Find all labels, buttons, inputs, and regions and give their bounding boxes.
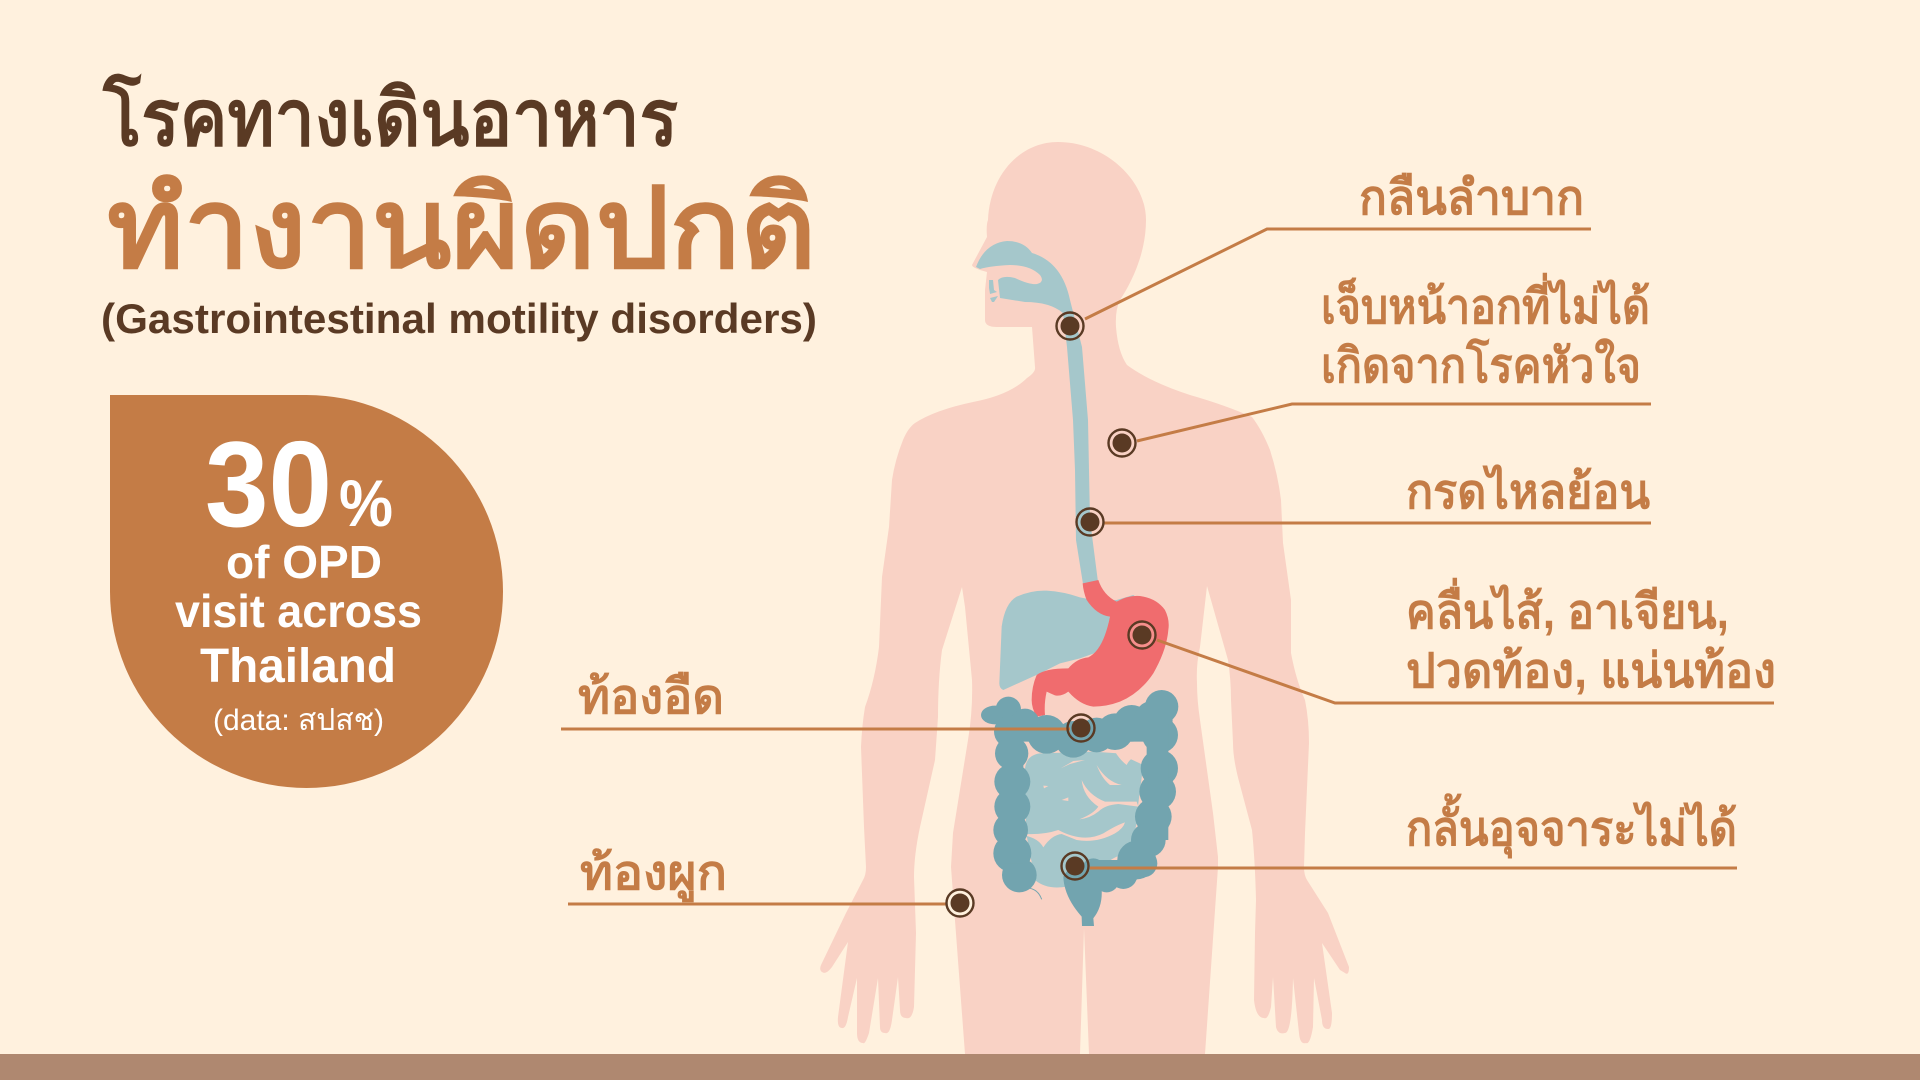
title line 2: ทำงานผิดปกติ xyxy=(107,166,816,291)
label: fecal incontinence: กลั้นอุจจาระไม่ได้ xyxy=(1406,793,1737,859)
percent sign: % xyxy=(339,466,393,540)
marker: esophagus xyxy=(1076,508,1104,536)
data source: (data: สปสช) xyxy=(213,704,384,737)
title block xyxy=(101,72,817,342)
liver xyxy=(999,591,1140,690)
marker: stomach xyxy=(1128,622,1156,648)
label: nausea, vomiting, pain, fullness xyxy=(1406,577,1776,698)
label: non-cardiac chest pain: เกิดจากโรคหัวใจ xyxy=(1321,337,1641,393)
airway and esophagus xyxy=(976,241,1098,584)
markers xyxy=(946,312,1156,916)
drop shape xyxy=(110,395,503,788)
english subtitle: (Gastrointestinal motility disorders) xyxy=(101,295,817,342)
label: non-cardiac chest pain xyxy=(1321,272,1650,393)
marker: constipation xyxy=(946,890,974,916)
callout: 30 percent of OPD visits xyxy=(110,395,503,788)
stomach xyxy=(1032,580,1169,717)
marker: upper colon xyxy=(1068,714,1094,742)
label: non-cardiac chest pain: เจ็บหน้าอกที่ไม่ได้ xyxy=(1321,272,1650,334)
callout line 1: of OPD xyxy=(226,536,382,588)
marker: chest xyxy=(1108,430,1136,456)
label: difficulty swallowing: กลืนลำบาก xyxy=(1359,172,1584,225)
callout line 2: visit across xyxy=(175,585,422,637)
marker: throat xyxy=(1056,312,1084,340)
label: nausea, vomiting, pain, fullness: คลื่นไส้, อาเจียน, xyxy=(1406,577,1729,639)
label: bloating: ท้องอืด xyxy=(578,671,724,724)
label: constipation: ท้องผูก xyxy=(580,847,727,903)
human body silhouette xyxy=(820,142,1349,1054)
marker: lower colon xyxy=(1062,852,1088,880)
symptom labels xyxy=(578,172,1776,903)
bottom bar xyxy=(0,1054,1920,1080)
small intestine xyxy=(1025,750,1143,887)
big number: 30 xyxy=(205,416,332,552)
title line 1: โรคทางเดินอาหาร xyxy=(102,72,678,162)
label: acid reflux: กรดไหลย้อน xyxy=(1406,463,1650,519)
connector lines xyxy=(561,229,1774,904)
large intestine xyxy=(981,690,1178,926)
label: nausea, vomiting, pain, fullness: ปวดท้อง, แน่นท้อง xyxy=(1406,645,1776,698)
callout line 3: Thailand xyxy=(200,640,396,693)
